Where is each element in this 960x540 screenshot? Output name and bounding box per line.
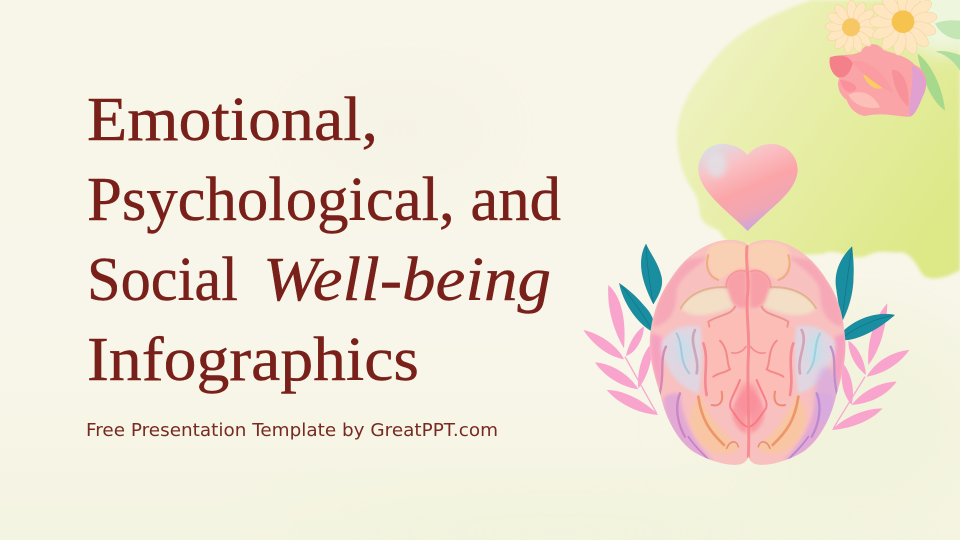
title: Well-being (263, 246, 551, 314)
title: Psychological, and (87, 166, 561, 234)
title: Infographics (87, 326, 419, 394)
title: Emotional, (87, 86, 378, 154)
illustration: heart and brain (583, 144, 909, 470)
right pink foliage (832, 303, 909, 430)
pale wash behind flowers (900, 0, 960, 55)
daisy left (825, 0, 879, 54)
title (87, 86, 561, 394)
heart (698, 144, 798, 231)
subtitle: Free Presentation Template by GreatPPT.com (86, 421, 498, 441)
title: Social (87, 246, 238, 314)
flower leaves (917, 20, 960, 111)
left pink foliage (583, 285, 658, 415)
brain folds (659, 247, 837, 462)
teal leaves (619, 244, 895, 340)
peony (830, 44, 926, 117)
lime watercolor blob (677, 0, 960, 278)
heart highlight (707, 152, 727, 178)
top right flowers (825, 0, 960, 117)
brain (650, 240, 846, 465)
daisy right (869, 0, 938, 56)
